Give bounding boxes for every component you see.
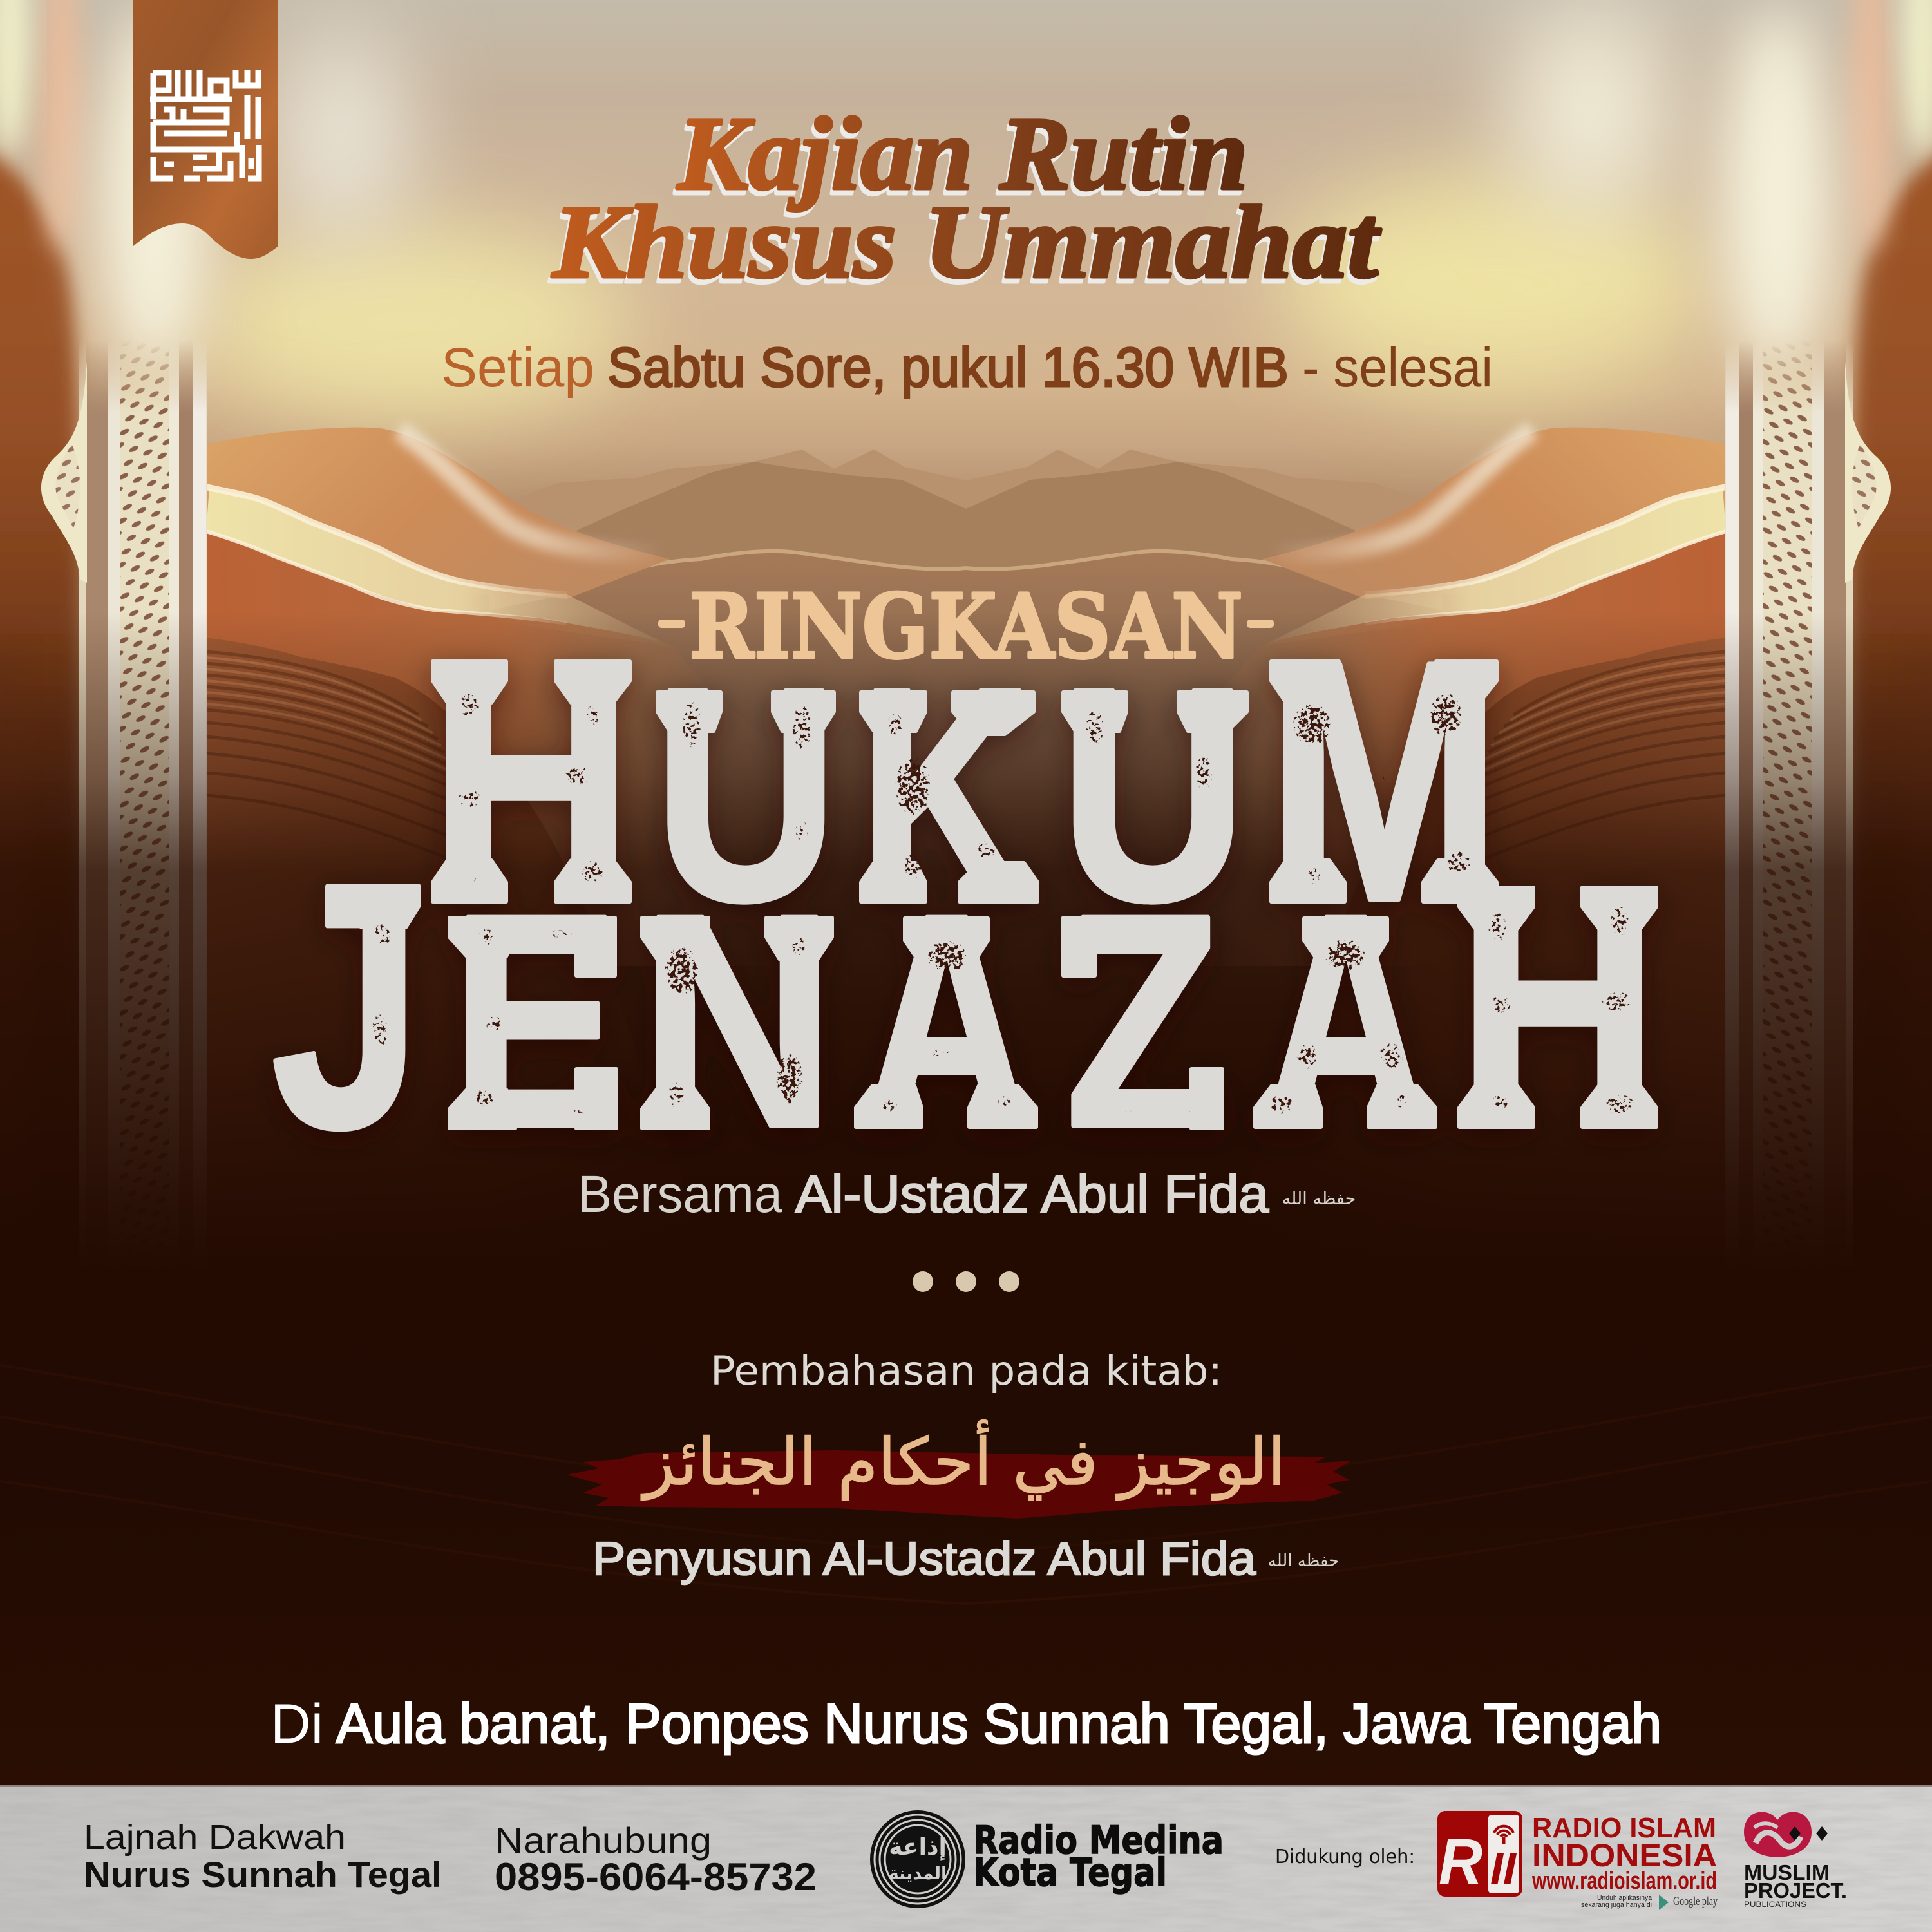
- contact: 0895-6064-85732: [495, 1855, 817, 1899]
- heading letters: J: [271, 811, 422, 1200]
- logo: muslim project: PUBLICATIONS: [1744, 1900, 1806, 1909]
- label: ringkasan: RINGKASAN: [689, 574, 1243, 679]
- radio name: [973, 1818, 1224, 1895]
- logo: radio islam indonesia: INDONESIA: [1532, 1837, 1717, 1873]
- main heading: hukum jenazah: [271, 591, 1658, 1200]
- contact: [495, 1820, 817, 1899]
- radio name: Radio Medina: [973, 1818, 1224, 1863]
- logo: radio islam indonesia: sekarang juga hanya di: [1581, 1901, 1652, 1909]
- heading letters: A: [863, 852, 1030, 1190]
- heading letters: M: [1267, 591, 1502, 972]
- heading letters: E: [451, 852, 620, 1190]
- author line: Penyusun Al-Ustadz Abul Fida: [592, 1533, 1256, 1585]
- heading letters: U: [1060, 625, 1247, 963]
- logo: radio medina: المدينة: [889, 1864, 947, 1884]
- three dots divider: [913, 1271, 1019, 1292]
- banner ribbon: [133, 0, 278, 259]
- logo: radio medina: إذاعة: [889, 1834, 947, 1861]
- grunge clusters: [366, 686, 1642, 1121]
- heading letters: H: [1457, 816, 1658, 1197]
- arabic book title: الوجيز في أحكام الجنائز: [640, 1419, 1286, 1501]
- logo: radio islam indonesia: [1437, 1811, 1718, 1910]
- brush stroke: [567, 1450, 1352, 1519]
- heading letters: K: [860, 625, 1027, 963]
- honorific: حفظه الله: [1268, 1551, 1339, 1571]
- icon: kufic bismillah: [150, 70, 259, 178]
- heading letters: [271, 591, 1658, 1200]
- organiser: Lajnah Dakwah: [84, 1818, 346, 1857]
- presenter line: Bersama: [578, 1165, 782, 1224]
- logo: muslim project: [1744, 1812, 1847, 1909]
- heading letters: U: [654, 625, 838, 963]
- logo: muslim project: MUSLIM: [1744, 1861, 1830, 1884]
- logo: radio islam indonesia: Unduh aplikasinya: [1597, 1894, 1653, 1902]
- heading letters: H: [430, 591, 633, 972]
- contact: Narahubung: [495, 1820, 712, 1861]
- footer: [0, 1785, 1932, 1932]
- location: Aula banat, Ponpes Nurus Sunnah Tegal, Jawa Tengah: [336, 1693, 1662, 1755]
- organiser: Nurus Sunnah Tegal: [84, 1854, 442, 1895]
- heading letters: A: [1263, 852, 1429, 1190]
- organiser: [84, 1818, 442, 1895]
- logo: radio islam indonesia: II: [1490, 1843, 1517, 1893]
- slab serifs: [345, 661, 1656, 1128]
- logo: muslim project: PROJECT.: [1744, 1879, 1847, 1902]
- schedule line: Sabtu Sore, pukul 16.30 WIB: [607, 337, 1289, 399]
- heading letters: Z: [1066, 852, 1220, 1190]
- heading letters: N: [640, 852, 835, 1190]
- title: [551, 97, 1381, 300]
- schedule line: - selesai: [1302, 337, 1493, 399]
- logo: radio islam indonesia: Google play: [1673, 1895, 1718, 1908]
- schedule line: Setiap: [441, 337, 594, 399]
- presenter line: [578, 1165, 1356, 1224]
- logo: radio islam indonesia: RADIO ISLAM: [1532, 1812, 1716, 1844]
- supported by: Didukung oleh:: [1275, 1846, 1415, 1868]
- title: Kajian Rutin: [676, 97, 1248, 212]
- honorific: حفظه الله: [1282, 1189, 1356, 1209]
- logo: radio islam indonesia: R: [1439, 1826, 1482, 1898]
- location: Di: [270, 1693, 323, 1755]
- schedule line: [441, 337, 1493, 399]
- logo: radio medina: [870, 1810, 965, 1908]
- logo: radio islam indonesia: www.radioislam.or.id: [1531, 1868, 1717, 1895]
- presenter line: Al-Ustadz Abul Fida: [795, 1165, 1269, 1224]
- title: Khusus Ummahat: [551, 185, 1381, 300]
- kitab label: Pembahasan pada kitab:: [710, 1347, 1222, 1394]
- radio name: Kota Tegal: [973, 1850, 1167, 1895]
